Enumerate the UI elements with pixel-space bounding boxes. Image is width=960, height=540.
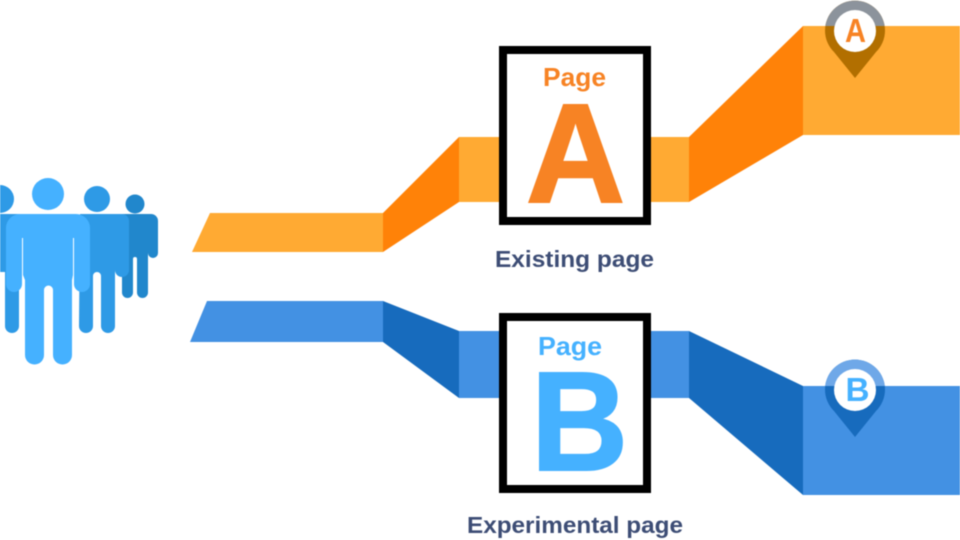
icon: map pin B: B [846, 371, 870, 408]
blue ribbon: page B traffic [190, 301, 960, 495]
label: Page (B): Page [538, 331, 602, 361]
panel: page B card [503, 317, 647, 500]
letter B: B [531, 342, 628, 500]
panel: page A card [503, 50, 647, 232]
letter A: A [526, 74, 625, 232]
label: Page (A): Page [543, 62, 606, 92]
icon: map pin B [825, 360, 885, 437]
caption: experimental page: Experimental page [467, 512, 683, 538]
orange ribbon: page A traffic [192, 26, 960, 252]
icon: group of users [0, 178, 158, 364]
icon: map pin A [825, 1, 885, 78]
icon: map pin A: A [845, 12, 866, 49]
caption: existing page: Existing page [495, 246, 654, 272]
